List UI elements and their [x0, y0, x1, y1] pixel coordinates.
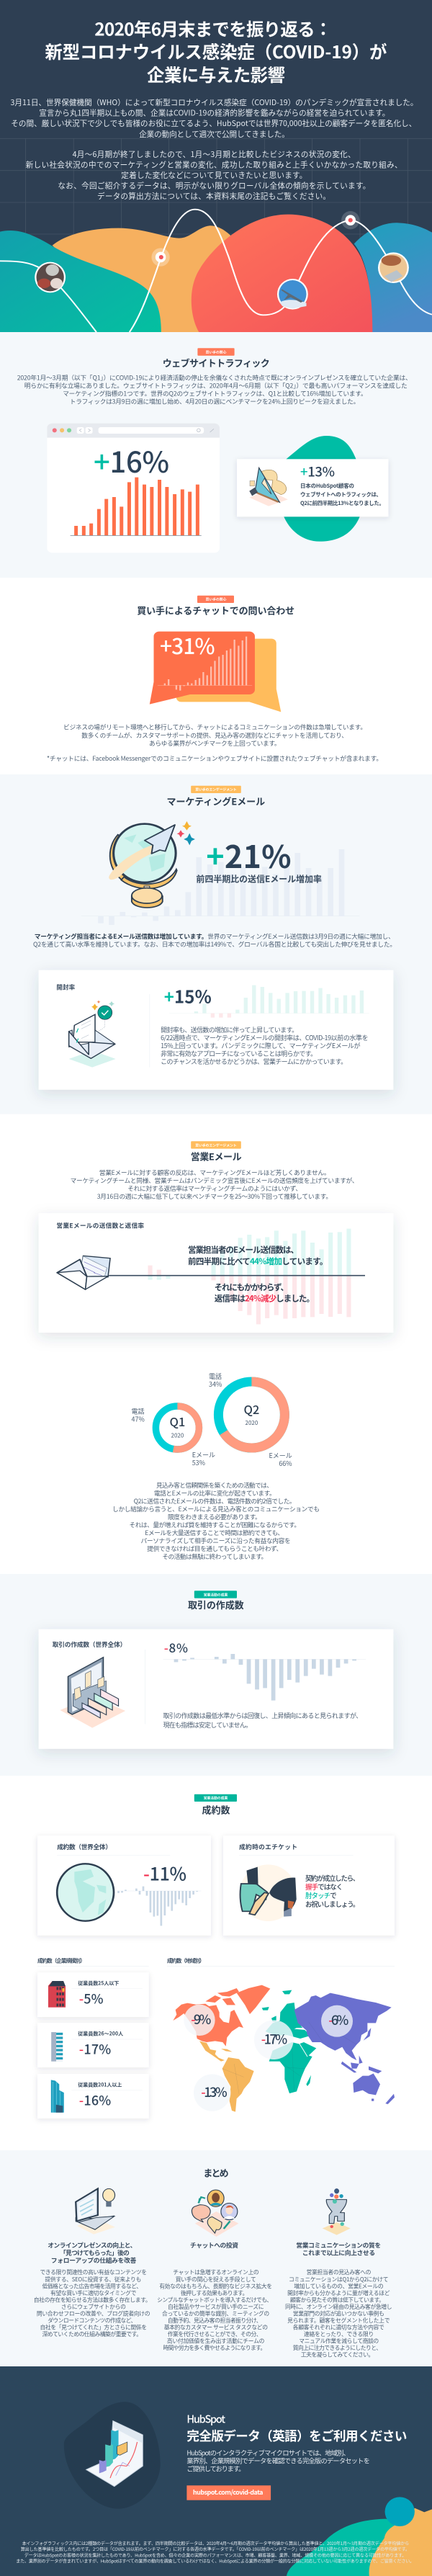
column text: コミュニケーションはQ1からQ2にかけて — [289, 2276, 389, 2284]
card heading: 成約数（世界全体） — [57, 1842, 112, 1851]
hero intro text — [10, 97, 418, 202]
map: asia pacific — [294, 1993, 395, 2104]
card: 26 to 200 employees — [37, 2023, 149, 2067]
panel: footer CTA — [0, 2366, 432, 2576]
column heading: これまで以上に向上させる — [302, 2248, 375, 2258]
heading: 取引の作成数 — [188, 1598, 244, 1611]
icon: funnel — [323, 2188, 351, 2235]
card: up to 25 employees: 従業員数25人以下 — [78, 1980, 119, 1987]
hero title — [45, 16, 387, 87]
chart: Q1 donut: Eメール — [192, 1450, 215, 1459]
chart: Q1 donut: 電話 — [131, 1406, 145, 1416]
callout: 44% increase: 営業担当者のEメール送信数は、 — [188, 1244, 299, 1256]
body text: 営業Eメールに対する顧客の反応は、マーケティングEメールほど芳しくありません。 — [99, 1168, 330, 1177]
column text: 高い付加価値を生み出す活動にチームの — [167, 2337, 265, 2345]
stat: +13%: +13% — [300, 462, 335, 481]
chart: deals bars — [163, 1654, 366, 1701]
column text: 基本的なカスタマー サービス タスクなどの — [164, 2324, 268, 2331]
column text: 買い手の関心を捉える手段として — [176, 2276, 256, 2284]
icon: grey-blue tower — [51, 2032, 63, 2062]
card text — [300, 482, 384, 507]
column: online presence — [34, 2188, 151, 2338]
column text: 同時に、オンライン経由の見込み客が急増し — [285, 2303, 392, 2311]
heading: 成約数 — [202, 1802, 230, 1817]
icon: globe — [57, 1855, 170, 1921]
card: up to 25 employees: -5% — [79, 1989, 104, 2008]
body text — [112, 1480, 320, 1561]
icon: envelope with check badge — [69, 994, 150, 1068]
map: north america — [173, 1985, 270, 2047]
card: 201+ employees: -16% — [79, 2090, 111, 2109]
map: latin america — [199, 2041, 254, 2112]
panel: website traffic — [0, 332, 432, 578]
chart: closed deals bars — [117, 1887, 201, 1926]
column text: 合っているかの簡単な識別、ミーティングの — [162, 2309, 269, 2318]
hero intro text: 宣言から丸1四半期以上もの間、企業はCOVID-19の経済的影響を鑑みながらの経営を迫られています。 — [39, 108, 390, 118]
card: sends and reply rate — [39, 1213, 393, 1333]
etiquette text: 肘タッチで — [305, 1890, 337, 1900]
callout: 24% decrease: それにもかかわらず、 — [215, 1282, 289, 1293]
icon: marker dots — [151, 211, 359, 267]
column: chat investment — [157, 2190, 272, 2352]
column text: 営業部門の対応が追いつかない事例も — [293, 2309, 384, 2318]
region values: -6% — [328, 2011, 348, 2029]
body text: Q2に送信されたEメールの件数は、電話件数の約2倍でした。 — [134, 1496, 296, 1506]
body text: ビジネスの場がリモート環境へと移行してから、チャットによるコミュニケーションの件数は急増しています。 — [63, 722, 366, 732]
body text — [17, 373, 412, 406]
panel: closed deals — [37, 1794, 395, 2119]
card: 201+ employees — [37, 2074, 149, 2119]
column heading — [296, 2240, 381, 2258]
photo: home office — [378, 252, 409, 283]
section tag — [194, 1591, 237, 1598]
column text: マニュアル作業を減らして商談の — [299, 2337, 379, 2345]
body text: それは、量が増えれば質を維持することが困難になるからです。 — [130, 1520, 300, 1529]
section tag — [191, 1141, 241, 1149]
chart: Q2 donut: Eメール — [269, 1451, 292, 1460]
stat: +21%: +21% — [206, 833, 291, 877]
logo: HubSpot: HubSpot — [186, 2411, 225, 2426]
hero intro text: 3月11日、世界保健機関（WHO）によって新型コロナウイルス感染症（COVID-19）のパンデミックが宣言されました。 — [10, 97, 418, 108]
hero intro text: 企業の動向として週次で公開してきました。 — [139, 129, 289, 140]
button: hubspot.com/covid-data — [193, 2487, 264, 2497]
column text: 深めていくための仕組み構築が重要です。 — [42, 2330, 142, 2338]
body text: マーケティング指標の1つです。世界のQ2のウェブサイトトラフィックは、Q1と比較して16%増加しています。 — [63, 389, 367, 398]
section tag — [197, 596, 234, 603]
chart: Q1 donut: 53% — [192, 1458, 205, 1467]
button — [186, 2485, 271, 2500]
background bar chart — [81, 849, 359, 925]
hero intro text: 新しい社会状況の中でのマーケティングと営業の変化、成功した取り組みと上手くいかなかった取り組み、 — [26, 160, 402, 170]
CTA text: 業界別、企業規模別でデータを確認できる完全版のデータセットを — [186, 2455, 370, 2465]
body text: パーソナライズして相手のニーズに沿った有益な内容を — [141, 1536, 291, 1545]
card heading: 取引の作成数（世界全体） — [53, 1640, 126, 1649]
column text: 時間や労力を多く費やせるようになります。 — [163, 2344, 266, 2352]
heading: まとめ — [203, 2165, 229, 2179]
icon: data chart — [64, 2402, 161, 2509]
card: global closed deals — [37, 1835, 211, 1936]
column heading: 「見つけてもらった」後の — [60, 2248, 130, 2258]
footnote: 算出した基準値を比較したものです。2つ目は「COVID-19以前のベンチマーク」に対する各週の水準データです。「COVID-19以前のベンチマーク」は2020年1月13週から3月2週の週次データの平均値です。 — [21, 2546, 410, 2552]
footnote: データはHubSpotのお客様の状況を集計したものであり、HubSpotを含め、個々の企業の実際のパフォーマンスは、市場、顧客基盤、業界、地域、規模その他の要因に応じて異なる可能性があります。 — [24, 2552, 406, 2559]
section tag — [191, 786, 241, 793]
stat: +31%: +31% — [160, 629, 215, 661]
card text: 現在も指標は安定していません。 — [163, 1720, 252, 1730]
column heading: 営業コミュニケーションの質を — [296, 2240, 381, 2250]
section tag: 買い手の関心 — [206, 597, 227, 602]
panel: summary — [0, 2150, 432, 2366]
footnote — [16, 2540, 414, 2564]
body text — [33, 931, 396, 949]
column text: ダウンロードコンテンツの作成など、 — [48, 2317, 136, 2325]
column text: 開封率からも分かるように量が増えるほど — [287, 2289, 390, 2297]
hero colour waves — [0, 210, 432, 332]
section tag — [197, 348, 235, 356]
column text: 連絡をとったり、できる限り — [304, 2330, 374, 2338]
stat: +16%: +16% — [94, 439, 169, 481]
section tag — [194, 1794, 237, 1802]
footnote: 本インフォグラフィックス内には2種類のデータが含まれます。まず、四半期間の比較データは、2020年4月～6月期の週次データ平均値から算出した基準値と、2020年1月～3月期の週次データ平均値から — [22, 2540, 409, 2546]
heading: ウェブサイトトラフィック — [163, 356, 270, 370]
region values: -9% — [191, 2010, 211, 2029]
column text: 各顧客それぞれに適切な方法や内容で — [293, 2324, 384, 2331]
heading: by region: 成約数（地域別） — [167, 1956, 204, 1965]
panel: sales email — [39, 1141, 393, 1561]
column text: 見られます。顧客をセグメント化した上で — [287, 2317, 390, 2325]
CTA text: HubSpotのインタラクティブマイクロサイトでは、地域別、 — [186, 2447, 350, 2457]
body text: マーケティング担当者によるEメール送信数は増加しています。世界のマーケティングEメール送信数は3月9日の週に大幅に増加し、 — [35, 931, 395, 941]
chart: Q1 donut: 2020 — [171, 1432, 184, 1439]
icon: open envelope — [57, 1256, 110, 1289]
chart: Q2 donut: 2020 — [246, 1419, 258, 1427]
panel: buyer chat — [47, 596, 382, 763]
card: 201+ employees: 従業員数201人以上 — [78, 2082, 122, 2089]
card heading: 開封率 — [56, 983, 76, 992]
card text — [163, 1711, 362, 1730]
hero intro text: その間、厳しい状況下で少しでも皆様のお役に立てるよう、HubSpotでは世界70,000社以上の顧客データを匿名化し、 — [11, 118, 416, 129]
column text: 有効なのはもちろん、長期的なビジネス拡大を — [159, 2282, 272, 2291]
card text — [161, 1025, 369, 1066]
hero title: 2020年6月末までを振り返る： — [94, 16, 332, 42]
column text — [157, 2268, 272, 2352]
card text: 日本のHubSpot顧客の — [300, 482, 354, 490]
icon: chat avatars — [192, 2190, 238, 2237]
column text — [285, 2268, 392, 2358]
hero title: 新型コロナウイルス感染症（COVID-19）が — [45, 39, 387, 64]
panel: deals created — [0, 1574, 432, 1776]
stat: +15%: +15% — [164, 983, 212, 1009]
card text: Q2に前四半期比13%となりました。 — [300, 499, 384, 507]
stat: -8%: -8% — [164, 1638, 188, 1656]
callout: 24% decrease — [215, 1282, 315, 1304]
chart: faint open rate bars — [169, 985, 369, 1018]
chart: diverging bars — [109, 1229, 365, 1324]
chart: world map by region — [173, 1985, 395, 2112]
heading: 営業Eメール — [191, 1150, 242, 1163]
body text: しかし結論から言うと、Eメールによる見込み客とのコミュニケーションでも — [112, 1504, 320, 1513]
section tag: 営業活動の成果 — [204, 1796, 228, 1801]
photo: airplane — [277, 279, 308, 310]
card heading: 成約時のエチケット — [239, 1842, 297, 1851]
heading: 買い手によるチャットでの問い合わせ — [137, 604, 294, 617]
body text: Q2を通じて高い水準を維持しています。なお、日本での増加率は149%で、グローバル各国と比較しても突出した伸びを見せました。 — [33, 939, 396, 949]
card text: 取引の作成数は最低水準からは回復し、上昇傾向にあると見られますが、 — [163, 1711, 362, 1720]
CTA heading: 完全版データ（英語）をご利用ください — [186, 2427, 407, 2445]
panel: marketing email — [0, 774, 432, 1114]
section tag: 買い手のエンゲージメント — [195, 787, 237, 792]
chart: Q2 donut: 66% — [279, 1459, 292, 1468]
chart: Q2 donut: 電話 — [209, 1372, 222, 1381]
body text: Eメールを大量送信することで時間は節約できても、 — [145, 1528, 284, 1537]
card: 26 to 200 employees: -17% — [79, 2040, 111, 2059]
chart: Q2 donut — [209, 1372, 292, 1468]
body text: マーケティングチームと同様、営業チームはパンデミック宣言後にEメールの送信頻度を上げていますが、 — [71, 1176, 359, 1185]
callout: 44% increase — [188, 1244, 328, 1267]
body text: 電話とEメールの比率に変化が起きています。 — [154, 1488, 276, 1498]
panel: hero — [0, 0, 432, 332]
icon: red building — [48, 1981, 66, 2008]
photo: medical worker — [35, 262, 66, 292]
region values — [191, 2010, 348, 2101]
body text: トラフィックは3月9日の週に増加し始め、4月20日の週にベンチマークを24%上回りピークを迎えました。 — [70, 396, 359, 406]
icon: glass tower — [51, 2080, 64, 2113]
column: sales communication — [285, 2188, 392, 2358]
section tag: 買い手の関心 — [206, 349, 227, 354]
region values: -17% — [261, 2029, 287, 2048]
browser window chart — [47, 424, 220, 553]
hero intro text: データの算出方法については、本資料末尾の注記もご覧ください。 — [97, 191, 330, 202]
icon: laptop and bulb — [76, 2188, 115, 2235]
hero intro text: なお、今回ご紹介するデータは、明示がない限りグローバル全体の傾向を示しています。 — [58, 180, 370, 192]
card text: 6/22週時点で、マーケティングEメールの開封率は、COVID-19以前の水準を — [161, 1033, 369, 1042]
etiquette text: 契約が成立したら、 — [305, 1873, 359, 1883]
icon: globe and paper plane — [109, 821, 195, 908]
card: Japan +13% — [237, 436, 389, 542]
column heading: オンラインプレゼンスの向上と、 — [48, 2240, 136, 2250]
etiquette text — [305, 1873, 359, 1909]
column text: 提供する、SEOに投資する、従来よりも — [45, 2276, 141, 2284]
body text — [47, 722, 382, 763]
column heading — [48, 2240, 137, 2265]
column text: 顧客から見たその質は低下しています。 — [290, 2297, 384, 2304]
column text: 営業担当者の見込み客への — [307, 2268, 372, 2276]
body text: 明らかに有利な立場にありました。ウェブサイトトラフィックは、2020年4月～6月期（以下「Q2」）で最も高いパフォーマンスを達成した — [24, 380, 408, 390]
card: open rate — [39, 970, 393, 1090]
region values: -13% — [201, 2083, 228, 2101]
column text: 低価格となった広告市場を活用するなど、 — [42, 2282, 142, 2291]
column text: 問い合わせフローの改善や、ブログ読者向けの — [37, 2309, 150, 2318]
column text: 工夫を凝らしてみてください。 — [301, 2351, 374, 2358]
CTA text — [186, 2447, 370, 2473]
card text: 非常に有効なアプローチになっていることは明らかです。 — [161, 1049, 317, 1058]
body text: あらゆる業界がベンチマークを上回っています。 — [149, 738, 281, 748]
column heading: フォローアップの仕組みを改善 — [51, 2255, 137, 2265]
card text: 開封率も、送信数の増加に伴って上昇しています。 — [161, 1025, 298, 1034]
body text: その活動は無駄に終わってしまいます。 — [162, 1552, 267, 1561]
card text: このチャンスを活かせるかどうかは、営業チームにかかっています。 — [161, 1057, 347, 1066]
body text — [71, 1168, 359, 1201]
card text: 15%上回っています。パンデミックに際して、マーケティングEメールが — [161, 1041, 360, 1050]
column text: さらにウェブサイトからの — [61, 2303, 126, 2311]
stat: -11%: -11% — [143, 1861, 186, 1887]
card heading: 営業Eメールの送信数と返信率 — [56, 1220, 144, 1230]
body text: それに対する返信率はマーケティングチームのようにはいかず、 — [127, 1184, 302, 1193]
callout: 24% decrease: 返信率は24%減少しました。 — [215, 1292, 315, 1304]
chat bubble chart — [150, 629, 281, 712]
section tag: 買い手のエンゲージメント — [195, 1142, 237, 1148]
footnote: また、業界別のデータが含まれていますが、HubSpotはすべての業界の動向を調査しているわけではなく、HubSpotによる業界の分類が一般的な分類に対応していない可能性がありますので、ご留意ください。 — [16, 2557, 414, 2564]
callout: 44% increase: 前四半期に比べて44%増加しています。 — [188, 1256, 328, 1267]
map bubble: -13% — [194, 2074, 230, 2111]
column text: 有望な買い手に適切なタイミングで — [50, 2289, 137, 2297]
icon: isometric board — [60, 1650, 145, 1728]
column text: チャットは急増するオンライン上の — [173, 2268, 259, 2276]
etiquette text: お祝いしましょう。 — [305, 1899, 359, 1909]
column heading: チャットへの投資 — [190, 2240, 238, 2250]
stat caption: 前四半期比の送信Eメール増加率 — [196, 873, 322, 885]
CTA text: ご提供しております。 — [186, 2463, 245, 2473]
column text: 後押しする効果もあります。 — [181, 2289, 248, 2297]
heading: by company size: 成約数（企業規模別） — [37, 1956, 86, 1965]
body text: 見込み客と信頼関係を築くための活動では、 — [156, 1480, 273, 1490]
card: 26 to 200 employees: 従業員数26～200人 — [78, 2030, 123, 2037]
column text: 増加しているものの、営業Eメールの — [294, 2282, 384, 2291]
heading: マーケティングEメール — [167, 794, 265, 808]
column text: 自社製品やサービスが買い手のニーズに — [168, 2303, 264, 2311]
chart: Q2 donut: Q2 — [243, 1400, 259, 1418]
column text: シンプルなチャットボットを導入するだけでも、 — [157, 2297, 272, 2304]
section tag: 営業活動の成果 — [204, 1592, 228, 1597]
decorative blobs — [287, 2497, 432, 2576]
column text: 作業を代行させることができ、その分、 — [168, 2330, 262, 2338]
body text: 提供できなければ目を通してもらうことも叶わず、 — [147, 1544, 282, 1553]
chart: Q1 donut: Q1 — [169, 1413, 185, 1430]
body text: 2020年1月～3月期（以下「Q1」）にCOVID-19により経済活動の停止を余儀なくされた時点で既にオンラインプレゼンスを確立していた企業は、 — [17, 373, 412, 382]
body text: 数多くのチームが、カスタマーサポートの提供、見込み客の選別などにチャットを活用しており、 — [81, 730, 348, 740]
column text: 自社の存在を知らせる方法は数多く存在します。 — [34, 2297, 151, 2304]
hero title: 企業に与えた影響 — [147, 62, 285, 87]
hero intro text: 4月～6月期が終了しましたので、1月～3月期と比較したビジネスの状況の変化、 — [73, 149, 356, 160]
body text: *チャットには、Facebook Messengerでのコミュニケーションやウェブサイトに設置されたウェブチャットが含まれます。 — [47, 753, 382, 763]
body text: 3月16日の週に大幅に低下して以来ベンチマークを25～30%下回って推移しています。 — [97, 1191, 332, 1201]
card text: ウェブサイトへのトラフィックは、 — [300, 491, 382, 498]
map: emea — [262, 1990, 316, 2093]
column text: 自社を「見つけてくれた」方とさらに関係を — [40, 2324, 147, 2331]
chart: Q1 donut: 47% — [131, 1415, 145, 1423]
icon: ruler and tools — [249, 468, 288, 506]
card: deals — [39, 1629, 393, 1749]
chart: Q1 donut — [131, 1406, 215, 1467]
column text: できる限り関連性の高い有益なコンテンツを — [40, 2268, 147, 2276]
column text: 質向上に注力できるようにしたりと、 — [293, 2344, 382, 2352]
hero intro text: 定着した変化などについて見ていきたいと思います。 — [121, 170, 307, 181]
column text — [34, 2268, 151, 2338]
card: up to 25 employees — [37, 1972, 149, 2017]
card: closing etiquette — [223, 1835, 395, 1936]
etiquette text: 握手ではなく — [305, 1882, 343, 1892]
icon: elbow bump — [239, 1855, 354, 1921]
chart: Q2 donut: 34% — [209, 1379, 222, 1389]
column text: 自動予約、見込み客の担当者振り分け、 — [168, 2317, 262, 2325]
body text: 限度をわきまえる必要があります。 — [168, 1512, 261, 1521]
